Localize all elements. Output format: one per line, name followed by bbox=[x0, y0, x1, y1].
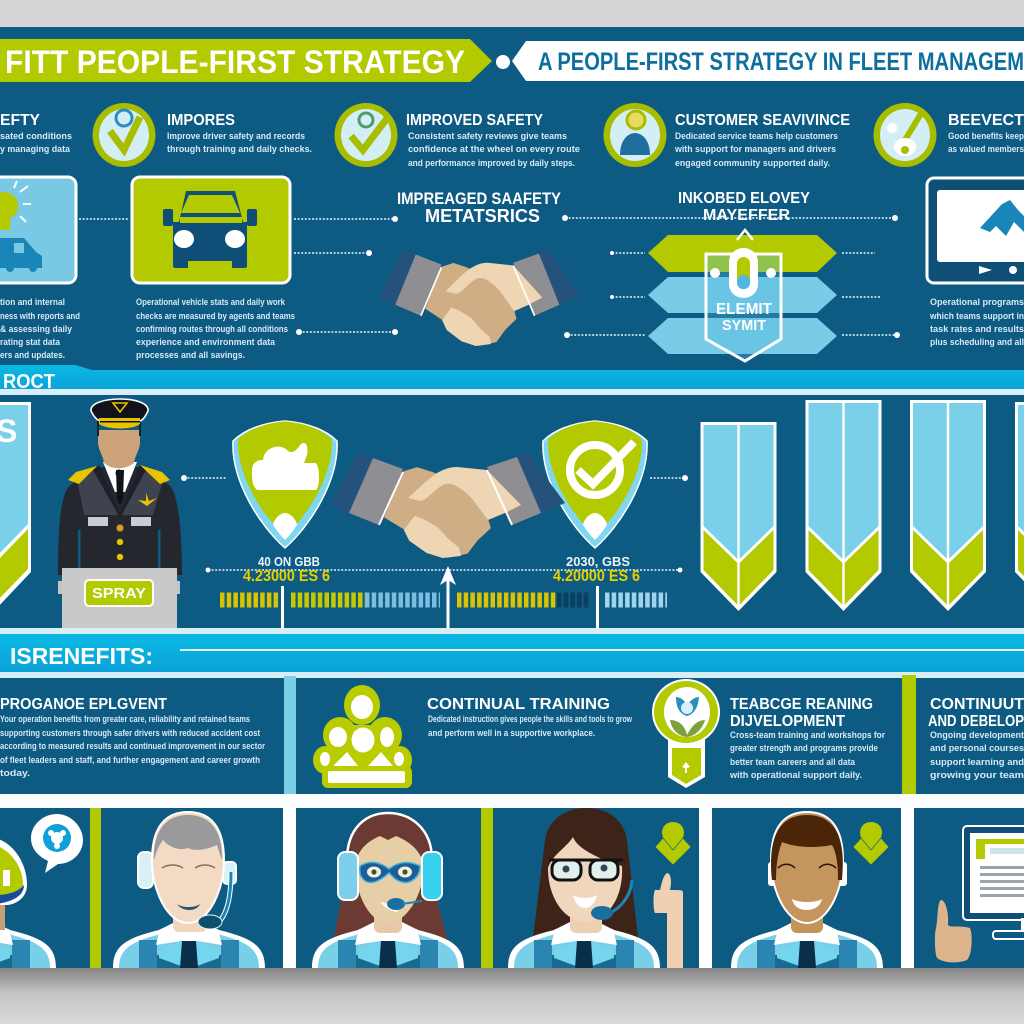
subtitle banner bbox=[512, 41, 1024, 81]
text block: customer service: CUSTOMER SEAVIVINCE bbox=[675, 112, 850, 129]
text block: left tile bbox=[0, 297, 80, 361]
icon: speech bubble bbox=[31, 814, 83, 873]
icon: development badge bbox=[652, 679, 720, 788]
text block: left tile: tion and internal bbox=[0, 297, 65, 308]
heading: improved efficiency bbox=[678, 190, 810, 224]
text block: improved safety: IMPROVED SAFETY bbox=[406, 112, 543, 129]
timeline: progress bars bbox=[220, 592, 667, 608]
pennant: column 2 bbox=[806, 400, 882, 611]
diagram: layered hexagon stack: ELEMIT bbox=[716, 301, 772, 318]
text block: teamwork development bbox=[729, 696, 885, 781]
text block: car tile: processes and all savings. bbox=[136, 350, 245, 361]
backdrop: top margin bbox=[0, 0, 1024, 28]
text block: car tile: checks are measured by agents and teams bbox=[136, 311, 295, 322]
diagram: layered hexagon stack bbox=[648, 230, 837, 361]
text block: car tile: confirming routes through all conditions bbox=[136, 324, 288, 335]
text block: left tile: & assessing daily bbox=[0, 324, 73, 335]
icon: check badge 1 bbox=[92, 103, 156, 167]
text block: impores: through training and daily checks. bbox=[167, 144, 312, 155]
icon: lime pin bbox=[655, 822, 691, 865]
portrait divider: lime 1 bbox=[90, 808, 101, 968]
portrait divider: white 3 bbox=[901, 808, 914, 968]
text block: teamwork development: greater strength and programs provide bbox=[730, 743, 878, 754]
icon: monitor bbox=[927, 178, 1024, 283]
text block: impores: IMPORES bbox=[167, 112, 235, 129]
text block: continued development: support learning and bbox=[930, 757, 1024, 768]
text block: improved safety: confidence at the wheel on every route bbox=[408, 144, 580, 155]
heading: improved safety metrics: IMPREAGED SAAFETY bbox=[397, 189, 562, 208]
text block: improved safety bbox=[406, 112, 580, 169]
text block: performance: according to measured results and continued improvement in our sector bbox=[0, 741, 265, 752]
connector lines: shields bbox=[181, 475, 688, 481]
text block: customer service bbox=[674, 112, 850, 169]
text block: performance: today. bbox=[0, 768, 30, 779]
portrait divider: white 1 bbox=[283, 808, 296, 968]
text block: monitor bbox=[929, 297, 1024, 348]
podium: SPRAY bbox=[92, 585, 146, 602]
text block: safety stub: sated conditions bbox=[0, 131, 72, 142]
text block: customer service: with support for managers and drivers bbox=[674, 144, 836, 155]
text block: teamwork development: better team careers and all data bbox=[730, 757, 856, 768]
divider bbox=[284, 676, 296, 798]
text block: safety stub: y managing data bbox=[0, 144, 71, 155]
portrait: agent with brown hair bbox=[731, 813, 883, 968]
section strip: impact: ROCT bbox=[3, 371, 55, 393]
text block: left tile: rating stat data bbox=[0, 337, 61, 348]
text block: continual training: Dedicated instruction gives people the skills and tools to grow bbox=[428, 714, 632, 725]
metric: right figure: 4.20000 ES 6 bbox=[553, 568, 640, 585]
band below benefits bbox=[0, 672, 1024, 678]
portrait: person in helmet, partial bbox=[0, 838, 56, 968]
text block: performance: Your operation benefits from greater care, reliability and retained teams bbox=[0, 714, 250, 725]
icon: lime pin bbox=[853, 822, 889, 865]
portrait: agent with black glasses bbox=[508, 808, 660, 968]
text block: safety stub bbox=[0, 112, 72, 155]
section strip: impact bbox=[0, 365, 1024, 393]
shield: check mark bbox=[543, 421, 647, 548]
text block: car tile: Operational vehicle stats and daily work bbox=[136, 297, 286, 308]
icon: handshake bbox=[379, 249, 580, 345]
text block: teamwork development: DIJVELOPMENT bbox=[730, 713, 845, 730]
white band between rows bbox=[0, 794, 1024, 808]
text block: teamwork development: TEABCGE REANING bbox=[730, 696, 873, 713]
section strip: benefits bbox=[0, 634, 1024, 672]
text block: left tile: ers and updates. bbox=[0, 350, 65, 361]
text block: improved safety: and performance improved by daily steps. bbox=[408, 158, 575, 169]
timeline: markers and arrow bbox=[281, 566, 599, 628]
heading: improved efficiency: MAYEFFER bbox=[703, 207, 790, 224]
text block: teamwork development: with operational support daily. bbox=[729, 770, 862, 781]
icon: thumbs up bbox=[654, 873, 683, 968]
podium bbox=[58, 568, 180, 630]
text block: benefit stub bbox=[948, 112, 1024, 155]
text block: car tile bbox=[136, 297, 295, 361]
text block: impores bbox=[167, 112, 312, 155]
pennant: column 1 bbox=[700, 422, 776, 611]
text block: left tile: ness with reports and bbox=[0, 311, 80, 322]
text block: continued development: growing your team bbox=[930, 770, 1024, 781]
text block: performance: supporting customers through safer drivers with reduced accident cost bbox=[0, 728, 261, 739]
title banner: FITT PEOPLE-FIRST STRATEGY bbox=[5, 44, 465, 80]
text block: customer service: engaged community supported daily. bbox=[675, 158, 830, 169]
text block: performance bbox=[0, 696, 265, 779]
icon: check badge 2 bbox=[334, 103, 398, 167]
text block: continual training bbox=[427, 696, 632, 739]
timeline: dotted axis bbox=[206, 568, 682, 572]
text block: continual training: and perform well in a supportive workplace. bbox=[428, 728, 595, 739]
metric: right figure: 2030, GBS bbox=[566, 555, 630, 569]
pennant: column 4 partial bbox=[1015, 402, 1024, 611]
connector lines: car tile bbox=[79, 216, 398, 335]
metric: left figure bbox=[243, 555, 330, 585]
text block: continued development bbox=[928, 696, 1024, 781]
metric: left figure: 40 ON GBB bbox=[258, 555, 320, 569]
heading: improved efficiency: INKOBED ELOVEY bbox=[678, 190, 810, 207]
text block: car tile: experience and environment data bbox=[136, 337, 276, 348]
pennant: column 3 bbox=[910, 400, 986, 611]
icon: people group bbox=[313, 685, 412, 788]
text block: continued development: CONTINUUT bbox=[930, 696, 1024, 713]
band above benefits bbox=[0, 628, 1024, 635]
metric: left figure: 4.23000 ES 6 bbox=[243, 568, 330, 585]
section strip: benefits: ISRENEFITS: bbox=[10, 643, 153, 669]
text block: performance: PROGANOE EPLGVENT bbox=[0, 696, 167, 713]
tile: bulb and van bbox=[0, 177, 76, 283]
text block: performance: of fleet leaders and staff, and further engagement and career growth bbox=[0, 755, 260, 766]
connector lines: layered stack bbox=[562, 215, 900, 338]
text block: safety stub: EFTY bbox=[0, 112, 40, 129]
heading: improved safety metrics bbox=[397, 189, 562, 226]
text block: improved safety: Consistent safety reviews give teams bbox=[408, 131, 567, 142]
icon: computer monitor bbox=[963, 826, 1024, 939]
heading: improved safety metrics: METATSRICS bbox=[425, 206, 540, 226]
text block: benefit stub: BEEVECT bbox=[948, 112, 1024, 129]
text block: impores: Improve driver safety and records bbox=[167, 131, 305, 142]
illustration: uniformed officer bbox=[58, 399, 182, 575]
tile: car bbox=[132, 177, 290, 283]
text block: customer service: Dedicated service teams help customers bbox=[675, 131, 838, 142]
diagram: layered hexagon stack: SYMIT bbox=[722, 317, 766, 334]
text block: continual training: CONTINUAL TRAINING bbox=[427, 696, 610, 713]
icon: benefit badge bbox=[874, 103, 936, 167]
icon: thumbs up beside monitor bbox=[935, 900, 972, 962]
banner connector dot bbox=[496, 55, 510, 69]
portrait divider: lime 2 bbox=[481, 808, 493, 968]
portrait divider: white 2 bbox=[699, 808, 712, 968]
shield: thumbs up bbox=[233, 421, 337, 548]
divider bbox=[902, 675, 916, 797]
pennant: left partial bbox=[0, 402, 31, 610]
metric: right figure bbox=[553, 555, 640, 585]
backdrop: bottom shadow bbox=[0, 968, 1024, 1024]
portrait: agent with glasses and headset bbox=[312, 813, 464, 968]
portrait: agent with grey hair bbox=[113, 813, 265, 968]
icon: handshake large bbox=[330, 452, 565, 557]
text block: teamwork development: Cross-team training and workshops for bbox=[730, 730, 885, 741]
icon: customer service badge bbox=[604, 103, 666, 167]
